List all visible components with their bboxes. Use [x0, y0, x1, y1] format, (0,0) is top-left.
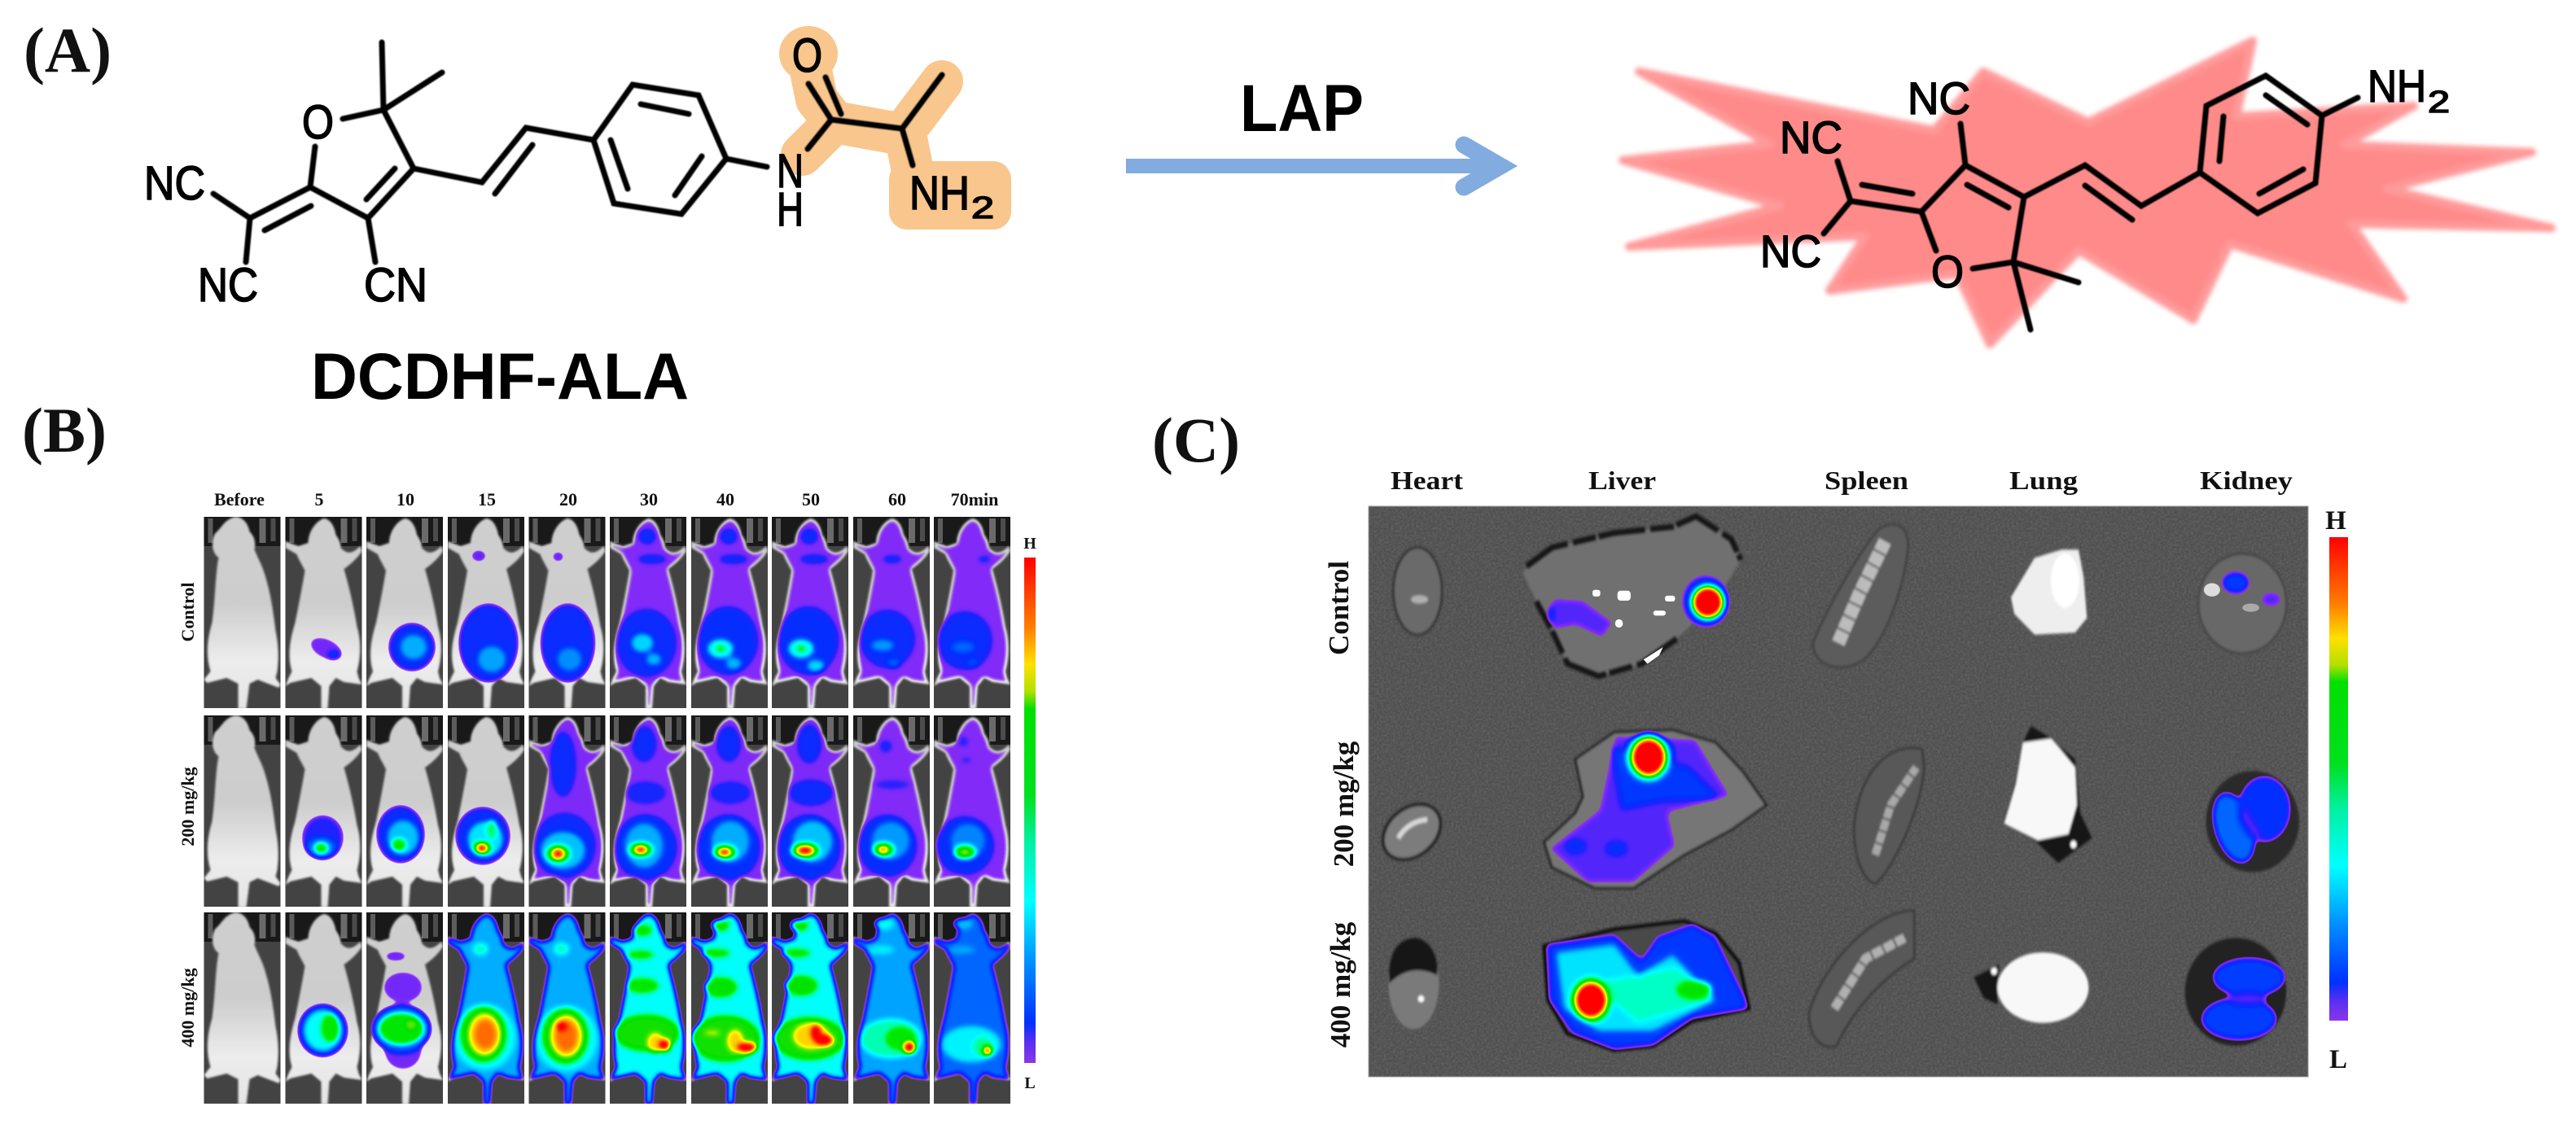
atom labels: NC	[144, 157, 205, 210]
200 mg/kg 30 min	[610, 715, 686, 907]
L label: L	[1024, 1074, 1036, 1092]
reaction arrow with LAP	[1126, 72, 1500, 187]
400 mg/kg 10 min	[366, 912, 443, 1104]
atom labels: N	[777, 145, 804, 198]
200 mg/kg 50 min	[772, 715, 848, 907]
row label: Control: Control	[1323, 561, 1355, 655]
organs: lung, kidney	[1974, 549, 2305, 1054]
panel label: B: (B)	[22, 395, 107, 466]
colour scale B	[1023, 535, 1036, 1092]
arrow	[1126, 145, 1500, 187]
row label: 400 mg/kg: 400 mg/kg	[177, 968, 198, 1047]
row label: 400 mg/kg: 400 mg/kg	[1325, 921, 1356, 1047]
kidney: 400 mg/kg	[2185, 938, 2295, 1054]
panel label: C: (C)	[1152, 405, 1240, 475]
panel A: fluorescent product on red burst	[1623, 41, 2552, 344]
column labels: 30	[640, 489, 658, 510]
control 30 min	[610, 517, 686, 708]
200 mg/kg 10 min	[366, 715, 443, 907]
enzyme label: LAP	[1240, 72, 1364, 146]
control 10 min	[366, 517, 443, 708]
colour scale C	[2325, 506, 2348, 1074]
row label: Control: Control	[177, 583, 198, 641]
atom labels: CN	[364, 259, 427, 312]
column labels: 10	[396, 489, 414, 510]
kidney: control	[2198, 553, 2295, 654]
organ column labels: Spleen	[1825, 466, 1908, 495]
product atom labels: NC	[1760, 225, 1821, 277]
control 60 min	[853, 517, 930, 708]
200 mg/kg 20 min	[529, 715, 606, 907]
kidney: 200 mg/kg	[2200, 763, 2305, 876]
control 15 min	[448, 517, 524, 708]
panel B: time-course mouse imaging	[177, 489, 1036, 1121]
column labels: 50	[802, 489, 820, 510]
control 70 min	[934, 517, 1010, 708]
column labels: 70min	[951, 489, 998, 510]
column labels: 15	[478, 489, 496, 510]
organ column labels: Liver	[1588, 466, 1656, 495]
organs: heart, liver, spleen	[1373, 516, 1924, 1062]
200 mg/kg 60 min	[853, 715, 930, 907]
400 mg/kg 60 min	[853, 912, 930, 1104]
row label: 200 mg/kg: 200 mg/kg	[177, 767, 198, 846]
product atom labels: O	[1931, 246, 1964, 297]
400 mg/kg 30 min	[610, 912, 686, 1104]
column labels: 40	[716, 489, 734, 510]
control 40 min	[691, 517, 768, 708]
liver: control	[1513, 516, 1763, 680]
product bonds	[1824, 76, 2358, 330]
bonds: DCDHF-ALA skeleton	[213, 42, 942, 262]
organ backdrop	[1369, 506, 2308, 1077]
400 mg/kg 20 min	[529, 912, 606, 1104]
control 50 min	[772, 517, 848, 708]
atom labels: O	[302, 96, 334, 149]
400 mg/kg 40 min	[691, 912, 768, 1104]
organ column labels: Lung	[2009, 466, 2078, 495]
atom labels: NC	[198, 259, 258, 312]
liver: 200 mg/kg	[1521, 706, 1770, 900]
atom labels: 2	[971, 191, 994, 225]
heart samples	[1373, 548, 1450, 1029]
spleen samples	[1809, 524, 1924, 1047]
gradient bar	[1024, 558, 1036, 1063]
product atom labels: NC	[1780, 112, 1842, 163]
atom labels: O	[792, 29, 822, 82]
highlight: orange alaninamide region	[779, 26, 1011, 230]
product atom labels: 2	[2428, 85, 2450, 120]
liver: 400 mg/kg	[1521, 909, 1770, 1062]
organ column labels	[1391, 466, 2293, 495]
control before	[204, 517, 282, 711]
200 mg/kg 40 min	[691, 715, 768, 907]
atom labels	[144, 29, 994, 312]
red burst	[1623, 41, 2552, 344]
400 mg/kg before	[204, 912, 282, 1106]
200 mg/kg 5 min	[285, 715, 361, 907]
column labels	[214, 489, 998, 510]
400 mg/kg 70 min	[918, 896, 1027, 1121]
H label: H	[2325, 506, 2346, 536]
panel A: DCDHF-ALA structure	[144, 26, 1011, 312]
atom labels: NH	[909, 167, 970, 220]
row label: 200 mg/kg: 200 mg/kg	[1328, 741, 1360, 867]
panel label: A: (A)	[24, 15, 112, 85]
organ column labels: Kidney	[2200, 466, 2293, 495]
control 20 min	[529, 517, 606, 708]
gradient bar	[2329, 537, 2348, 1021]
panel C: ex vivo organ imaging	[1323, 466, 2348, 1077]
atom labels: H	[777, 183, 804, 236]
column labels: 60	[888, 489, 906, 510]
product atom labels: NC	[1908, 72, 1970, 124]
column labels: 5	[314, 489, 324, 510]
compound name: DCDHF-ALA	[311, 340, 689, 413]
lung samples	[1974, 549, 2092, 1023]
400 mg/kg 50 min	[772, 912, 848, 1104]
H label: H	[1023, 535, 1036, 553]
L label: L	[2329, 1045, 2347, 1074]
200 mg/kg before	[204, 715, 282, 909]
control 5 min	[285, 517, 361, 708]
400 mg/kg 15 min	[448, 912, 524, 1104]
column labels: 20	[559, 489, 577, 510]
product atom labels: NH	[2368, 60, 2426, 112]
organ column labels: Heart	[1391, 466, 1463, 495]
200 mg/kg 15 min	[448, 715, 524, 907]
column labels: Before	[214, 489, 265, 510]
product atom labels	[1760, 60, 2450, 297]
400 mg/kg 5 min	[285, 912, 361, 1104]
200 mg/kg 70 min	[934, 715, 1010, 907]
